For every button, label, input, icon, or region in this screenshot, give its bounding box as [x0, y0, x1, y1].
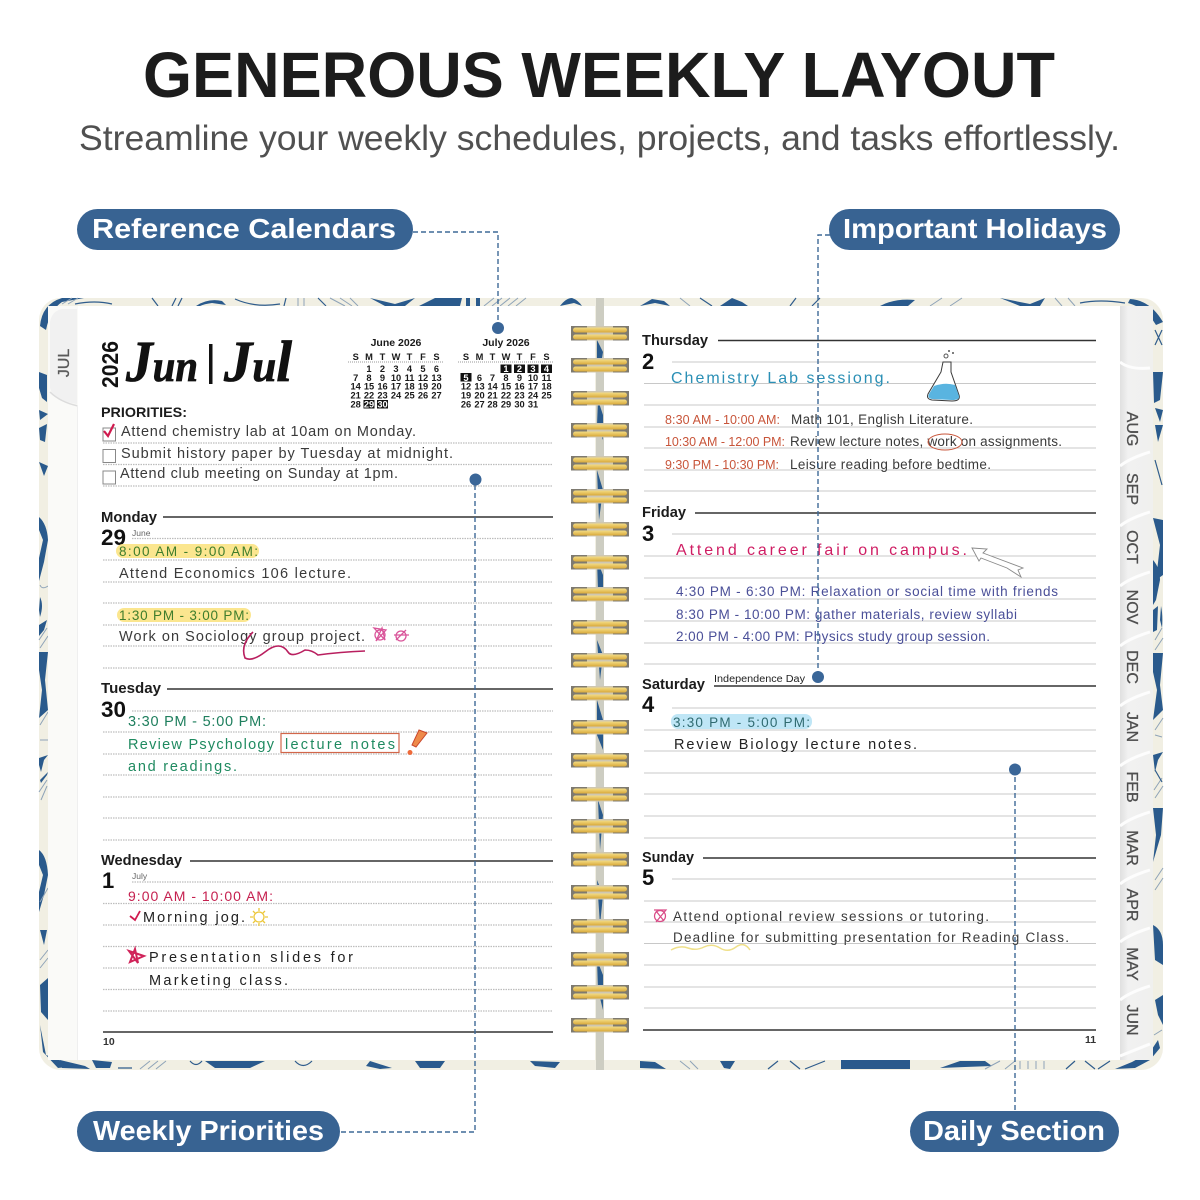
- section: Wednesday July 1: 1: [102, 868, 114, 893]
- page number 11: 11: [1085, 1034, 1096, 1046]
- icon: red check mark: [104, 424, 114, 436]
- panel: page stack left edge and JUL tab: [48, 306, 78, 1060]
- icon: pink doodles: [374, 628, 409, 641]
- heading: Jun | Jul: Jun: [125, 329, 198, 394]
- mini calendar: July 2026: 8: [503, 373, 509, 383]
- section: Thursday July 2: Math 101, English Literature.: [791, 412, 973, 427]
- section: Thursday July 2: Chemistry Lab sessiong.: [671, 370, 890, 387]
- mini calendar: July 2026: 4: [544, 364, 550, 374]
- tab label: JUL: JUL: [56, 349, 73, 377]
- panel: left page: [78, 306, 595, 1060]
- mini calendar: June 2026: 17: [391, 382, 401, 392]
- tab label: FEB: FEB: [1123, 771, 1140, 803]
- tab label: JUN: JUN: [1123, 1004, 1140, 1036]
- icon: orange exclamation mark: [408, 730, 427, 755]
- highlight: yellow 8:00: [116, 544, 259, 558]
- mini calendar: June 2026: 10: [391, 373, 401, 383]
- mini calendar: June 2026: 8: [366, 373, 372, 383]
- mini calendar: July 2026: 7: [490, 373, 495, 383]
- mini calendar: July 2026: 12: [461, 382, 471, 392]
- mini calendar: July 2026: 20: [474, 390, 485, 400]
- mini calendar: July 2026: 16: [514, 382, 525, 392]
- tab label: SEP: SEP: [1123, 473, 1140, 505]
- section: priorities: Attend club meeting on Sunday at 1pm.: [120, 466, 398, 482]
- mini calendar: July 2026: 3: [530, 364, 536, 374]
- floral pattern: left band: [39, 372, 48, 1020]
- mini calendar: July 2026: F: [530, 352, 536, 362]
- mini calendar: July 2026: S: [463, 352, 469, 362]
- icon: yellow sun: [250, 908, 268, 926]
- section: Wednesday July 1: July: [132, 871, 148, 881]
- mini calendar: July 2026: 2: [517, 364, 522, 374]
- icon: chemistry flask: [928, 350, 959, 401]
- section: Sunday July 5: Deadline for submitting presentation for Reading Class.: [673, 930, 1069, 945]
- section: Thursday July 2: 8:30 AM - 10:00 AM:: [665, 413, 780, 427]
- mini calendar: July 2026: 22: [501, 390, 511, 400]
- mini calendar: July 2026: 1: [503, 364, 509, 374]
- mini calendar: June 2026: 11: [405, 373, 414, 383]
- arrow: Reference Calendars connector: [413, 232, 504, 334]
- mini calendar: July 2026: W: [502, 352, 511, 362]
- spine with floral strip: [596, 298, 604, 1070]
- section: Thursday July 2: 2: [642, 349, 654, 374]
- mini calendar: July 2026: 27: [474, 400, 485, 410]
- section: Wednesday July 1: [101, 852, 553, 1048]
- mini calendar: July 2026: 19: [461, 390, 471, 400]
- icon: pink star: [129, 949, 144, 963]
- section: Sunday July 5: Sunday: [642, 849, 695, 866]
- spiral binding rings: [571, 326, 629, 1032]
- mini calendar: June 2026: 9: [380, 373, 385, 383]
- section: Monday June 29: Monday: [101, 509, 158, 526]
- mini calendar: July 2026: 24: [528, 390, 539, 400]
- arrow: Important Holidays connector: [812, 235, 830, 683]
- section: Monday June 29: Attend Economics 106 lecture.: [119, 566, 351, 582]
- mini calendar: July 2026: 21: [487, 390, 498, 400]
- panel: planner cover with floral border: [39, 298, 1163, 1070]
- mini calendar: June 2026: S: [433, 352, 440, 362]
- section: Friday July 3: Friday: [642, 504, 687, 521]
- section: Saturday July 4: 4: [642, 692, 655, 717]
- mini calendar: June 2026: 3: [393, 364, 399, 374]
- mini calendar: June 2026: 6: [434, 364, 439, 374]
- floral pattern: bottom band: [40, 1025, 1160, 1069]
- mini calendar: July 2026: 9: [517, 373, 522, 383]
- mini calendar: July 2026: 5: [463, 373, 469, 383]
- mini calendar: June 2026: 30: [377, 400, 388, 410]
- mini calendar: June 2026: 16: [377, 382, 388, 392]
- section: Monday June 29: June: [132, 528, 151, 538]
- mini calendar: June 2026: 24: [391, 390, 402, 400]
- mini calendar: July 2026: 28: [487, 400, 498, 410]
- icon: hand drawn arrow: [972, 548, 1023, 577]
- mini calendar: July 2026: 17: [528, 382, 538, 392]
- callout: Daily Section: Daily Section: [923, 1115, 1105, 1146]
- tab label: MAR: MAR: [1123, 830, 1140, 866]
- section: Thursday July 2: 10:30 AM - 12:00 PM:: [665, 435, 785, 449]
- section: priorities: PRIORITIES:: [101, 404, 187, 420]
- section: Thursday July 2: 9:30 PM - 10:30 PM:: [665, 458, 779, 472]
- mini calendar: June 2026: 5: [420, 364, 426, 374]
- subtitle: Streamline your weekly schedules, projects, and tasks effortlessly.: [79, 119, 1120, 158]
- tab label: MAY: MAY: [1123, 947, 1140, 981]
- mini calendar: June 2026: 26: [418, 390, 428, 400]
- section: Monday June 29: 29: [101, 525, 126, 550]
- mini calendar: June 2026: 20: [431, 382, 442, 392]
- mini calendar: July 2026: 30: [514, 400, 525, 410]
- callout: Weekly Priorities: [77, 1111, 340, 1152]
- section: Friday July 3: Attend career fair on campus.: [676, 542, 967, 559]
- icon: red circle around word work: [928, 434, 962, 450]
- section: Friday July 3: 3: [642, 521, 654, 546]
- mini calendar: July 2026: T: [490, 352, 496, 362]
- mini calendar: July 2026: 10: [528, 373, 538, 383]
- section: priorities: Attend chemistry lab at 10am on Monday.: [121, 424, 416, 440]
- mini calendar: June 2026: 27: [431, 390, 442, 400]
- section: Tuesday June 30: 3:30 PM - 5:00 PM:: [128, 714, 266, 730]
- mini calendar: July 2026: 31: [528, 400, 538, 410]
- section: priorities: [101, 404, 553, 486]
- section: Sunday July 5: [642, 849, 1096, 1046]
- section: Tuesday June 30: Review Psychology: [128, 737, 275, 753]
- panel: right page: [603, 306, 1120, 1060]
- mini calendar: July 2026: 13: [474, 382, 485, 392]
- section: Monday June 29: [101, 509, 553, 668]
- section: Monday June 29: Work on Sociology group project.: [119, 629, 365, 645]
- mini calendar: June 2026: 12: [418, 373, 428, 383]
- mini calendar: July 2026: 23: [514, 390, 525, 400]
- floral pattern: right band: [1153, 330, 1163, 1035]
- mini calendar: June 2026: 23: [377, 390, 388, 400]
- section: Saturday July 4: [642, 674, 1096, 838]
- section: Tuesday June 30: Tuesday: [101, 680, 162, 697]
- mini calendar: July 2026: M: [476, 352, 484, 362]
- mini calendar: June 2026: 2: [380, 364, 385, 374]
- page number 10: 10: [103, 1036, 115, 1048]
- title: GENEROUS WEEKLY LAYOUT: [143, 39, 1055, 111]
- section: Saturday July 4: 3:30 PM - 5:00 PM:: [673, 715, 810, 730]
- mini calendar: July 2026: [458, 337, 553, 410]
- tab label: OCT: OCT: [1123, 530, 1140, 564]
- section: Thursday July 2: Leisure reading before bedtime.: [790, 457, 991, 472]
- mini calendar: June 2026: 15: [364, 382, 374, 392]
- section: Saturday July 4: Independence Day: [714, 674, 805, 685]
- mini calendar: July 2026: S: [543, 352, 550, 362]
- mini calendar: June 2026: F: [420, 352, 426, 362]
- callout: Important Holidays: [829, 209, 1120, 250]
- mini calendar: June 2026: 13: [431, 373, 442, 383]
- icon: yellow wavy underline: [671, 945, 750, 950]
- mini calendar: June 2026: 28: [351, 400, 361, 410]
- tab label: DEC: DEC: [1123, 650, 1140, 684]
- mini calendar: July 2026: T: [517, 352, 523, 362]
- tab label: NOV: NOV: [1123, 590, 1140, 625]
- section: Wednesday July 1: Morning jog.: [143, 910, 245, 926]
- heading: year 2026: 2026: [97, 341, 123, 388]
- callout: Important Holidays: Important Holidays: [843, 213, 1107, 244]
- mini calendar: June 2026: 14: [351, 382, 362, 392]
- tab label: APR: APR: [1123, 889, 1140, 921]
- section: Tuesday June 30: 30: [101, 697, 126, 722]
- panel: month tabs right edge: [1120, 306, 1153, 1060]
- section: Friday July 3: [642, 504, 1096, 664]
- mini calendar: July 2026: July 2026: [482, 337, 530, 349]
- mini calendar: July 2026: 15: [501, 382, 511, 392]
- tab label: AUG: AUG: [1123, 412, 1140, 446]
- mini calendar: June 2026: 18: [404, 382, 415, 392]
- heading: Jun | Jul: [125, 329, 293, 394]
- section: Thursday July 2: [642, 332, 1096, 491]
- icon: check mark: [130, 911, 140, 920]
- section: Sunday July 5: 5: [642, 865, 654, 890]
- arrow: Daily Section connector: [1009, 764, 1021, 1110]
- mini calendar: June 2026: W: [392, 352, 401, 362]
- mini calendar: July 2026: 6: [477, 373, 482, 383]
- callout: Weekly Priorities: Weekly Priorities: [93, 1115, 324, 1146]
- section: Wednesday July 1: 9:00 AM - 10:00 AM:: [128, 888, 273, 904]
- section: priorities: Submit history paper by Tuesday at midnight.: [121, 446, 453, 462]
- mini calendar: June 2026: 19: [418, 382, 428, 392]
- icon: pink squiggle underline: [244, 632, 365, 659]
- section: Sunday July 5: Attend optional review sessions or tutoring.: [673, 909, 989, 924]
- mini calendar: June 2026: 21: [351, 390, 361, 400]
- tab label: JAN: JAN: [1123, 712, 1140, 742]
- mini calendar: June 2026: T: [380, 352, 386, 362]
- floral pattern: top band: [40, 298, 1163, 330]
- section: Monday June 29: 8:00 AM - 9:00 AM:: [119, 544, 258, 559]
- mini calendar: June 2026: T: [407, 352, 413, 362]
- mini calendar: June 2026: 22: [364, 390, 374, 400]
- mini calendar: June 2026: 7: [353, 373, 358, 383]
- mini calendar: July 2026: 26: [461, 400, 471, 410]
- mini calendar: July 2026: 25: [541, 390, 552, 400]
- mini calendar: June 2026: M: [365, 352, 373, 362]
- mini calendar: June 2026: 1: [366, 364, 372, 374]
- section: Tuesday June 30: [101, 680, 553, 840]
- callout: Reference Calendars: Reference Calendars: [92, 213, 396, 244]
- section: Friday July 3: 2:00 PM - 4:00 PM: Physics study group session.: [676, 629, 990, 644]
- mini calendar: July 2026: 18: [541, 382, 552, 392]
- section: Friday July 3: 8:30 PM - 10:00 PM: gather materials, review syllabi: [676, 607, 1017, 622]
- section: Friday July 3: 4:30 PM - 6:30 PM: Relaxation or social time with friends: [676, 584, 1058, 599]
- mini calendar: July 2026: 11: [542, 373, 551, 383]
- callout: Reference Calendars: [77, 209, 413, 250]
- section: Thursday July 2: Review lecture notes, work on assignments.: [790, 434, 1062, 449]
- mini calendar: July 2026: 29: [501, 400, 511, 410]
- mini calendar: June 2026: 4: [407, 364, 413, 374]
- mini calendar: June 2026: June 2026: [371, 337, 422, 349]
- mini calendar: June 2026: S: [353, 352, 359, 362]
- mini calendar: July 2026: 14: [487, 382, 498, 392]
- callout: Daily Section: [910, 1111, 1119, 1152]
- section: Wednesday July 1: Marketing class.: [149, 973, 288, 989]
- arrow: Weekly Priorities connector: [341, 474, 482, 1132]
- section: Tuesday June 30: and readings.: [128, 759, 237, 775]
- callout: boxed lecture notes: lecture notes: [285, 737, 395, 753]
- highlight: blue time: [671, 714, 812, 729]
- highlight: yellow 1:30: [117, 608, 251, 622]
- section: Saturday July 4: Saturday: [642, 676, 706, 693]
- section: Wednesday July 1: Wednesday: [101, 852, 183, 869]
- section: Wednesday July 1: Presentation slides for: [149, 950, 353, 966]
- section: Saturday July 4: Review Biology lecture notes.: [674, 737, 917, 753]
- heading: Jun | Jul: Jul: [223, 329, 293, 394]
- mini calendar: June 2026: [348, 337, 443, 410]
- section: Monday June 29: 1:30 PM - 3:00 PM:: [119, 608, 249, 623]
- section: Thursday July 2: Thursday: [642, 332, 709, 349]
- mini calendar: June 2026: 25: [404, 390, 415, 400]
- icon: pink doodle: [654, 910, 666, 922]
- mini calendar: June 2026: 29: [364, 400, 374, 410]
